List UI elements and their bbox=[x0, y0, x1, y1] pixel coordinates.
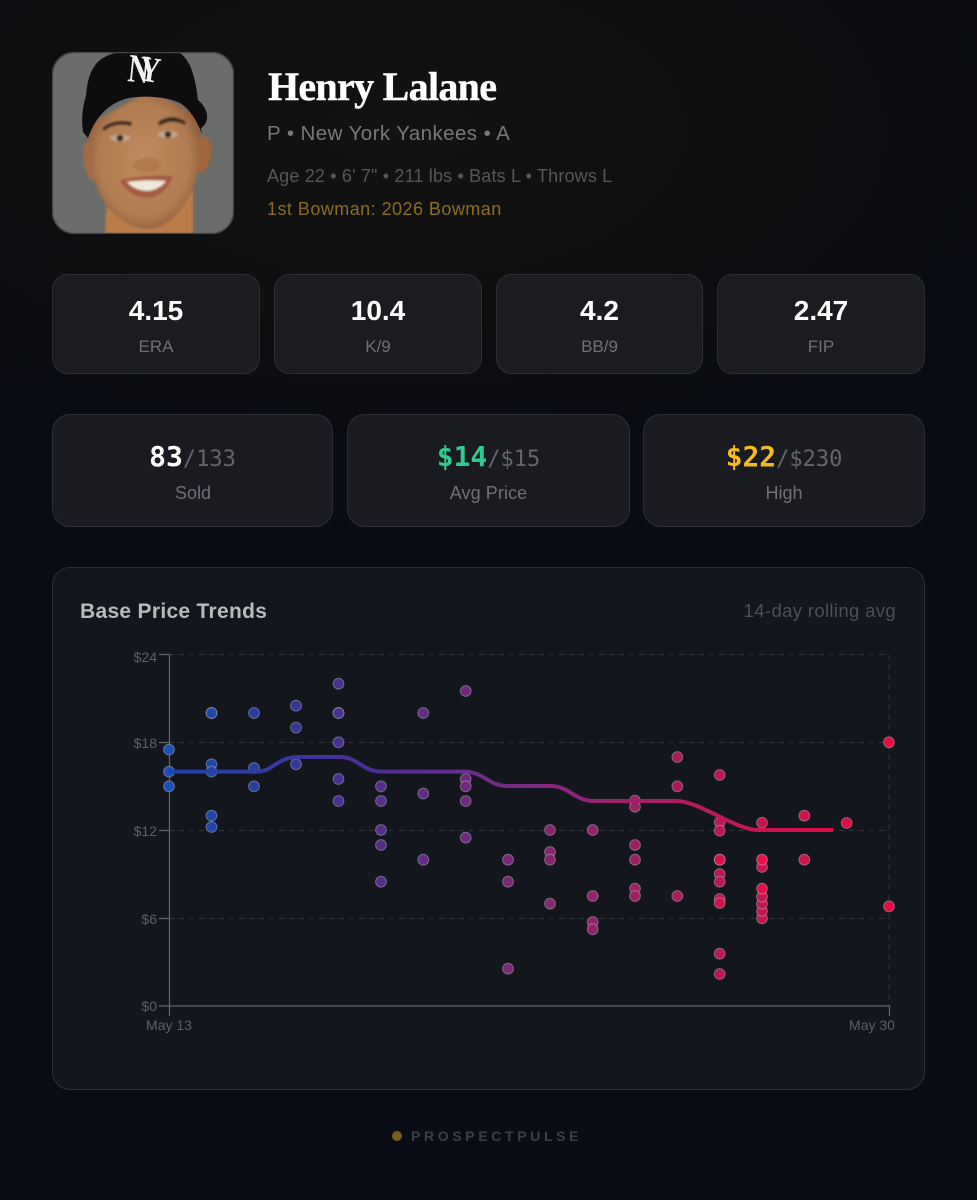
market card: high: $22/$230 bbox=[726, 440, 842, 473]
stat card: FIP bbox=[717, 274, 925, 374]
stat card: K/9: K/9 bbox=[365, 337, 391, 356]
market card: sold bbox=[52, 414, 333, 527]
stat card: K/9: 10.4 bbox=[351, 295, 405, 326]
stat card: BB/9: BB/9 bbox=[581, 337, 618, 356]
market card: sold: 83/133 bbox=[149, 440, 236, 473]
footer: brand: PROSPECTPULSE bbox=[411, 1128, 582, 1144]
chart: price scatter with trend line: $0 bbox=[141, 998, 157, 1014]
market card: average price bbox=[347, 414, 630, 527]
stat card: FIP: 2.47 bbox=[794, 295, 848, 326]
stat card: K/9 bbox=[274, 274, 482, 374]
market card: average price: $14/$15 bbox=[437, 440, 540, 473]
stat card: ERA: 4.15 bbox=[129, 295, 183, 326]
market card: high: High bbox=[765, 483, 803, 503]
heading: chart title: Base Price Trends bbox=[80, 600, 267, 623]
text: first bowman: 1st Bowman: 2026 Bowman bbox=[267, 199, 502, 219]
stat card: BB/9: 4.2 bbox=[580, 295, 619, 326]
text: position and team: P • New York Yankees • A bbox=[267, 122, 510, 145]
stat card: BB/9 bbox=[496, 274, 703, 374]
title: player name: Henry Lalane bbox=[268, 64, 496, 109]
chart: price scatter with trend line: $6 bbox=[141, 911, 157, 927]
icon: player photo bbox=[52, 52, 234, 234]
text: bio details: Age 22 • 6' 7" • 211 lbs • Bats L • Throws L bbox=[267, 166, 612, 186]
chart: price scatter with trend line: $24 bbox=[134, 649, 157, 665]
chart: price scatter with trend line: $12 bbox=[134, 823, 157, 839]
chart: price scatter with trend line: May 13 bbox=[146, 1017, 192, 1033]
text: chart subtitle: 14-day rolling avg bbox=[744, 600, 896, 621]
stat card: ERA bbox=[52, 274, 260, 374]
chart: price scatter with trend line: May 30 bbox=[849, 1017, 895, 1033]
market card: average price: Avg Price bbox=[450, 483, 527, 503]
market card: high bbox=[643, 414, 925, 527]
market card: sold: Sold bbox=[175, 483, 211, 503]
stat card: FIP: FIP bbox=[808, 337, 834, 356]
stat card: ERA: ERA bbox=[139, 337, 173, 356]
chart: price scatter with trend line: $18 bbox=[134, 735, 157, 751]
